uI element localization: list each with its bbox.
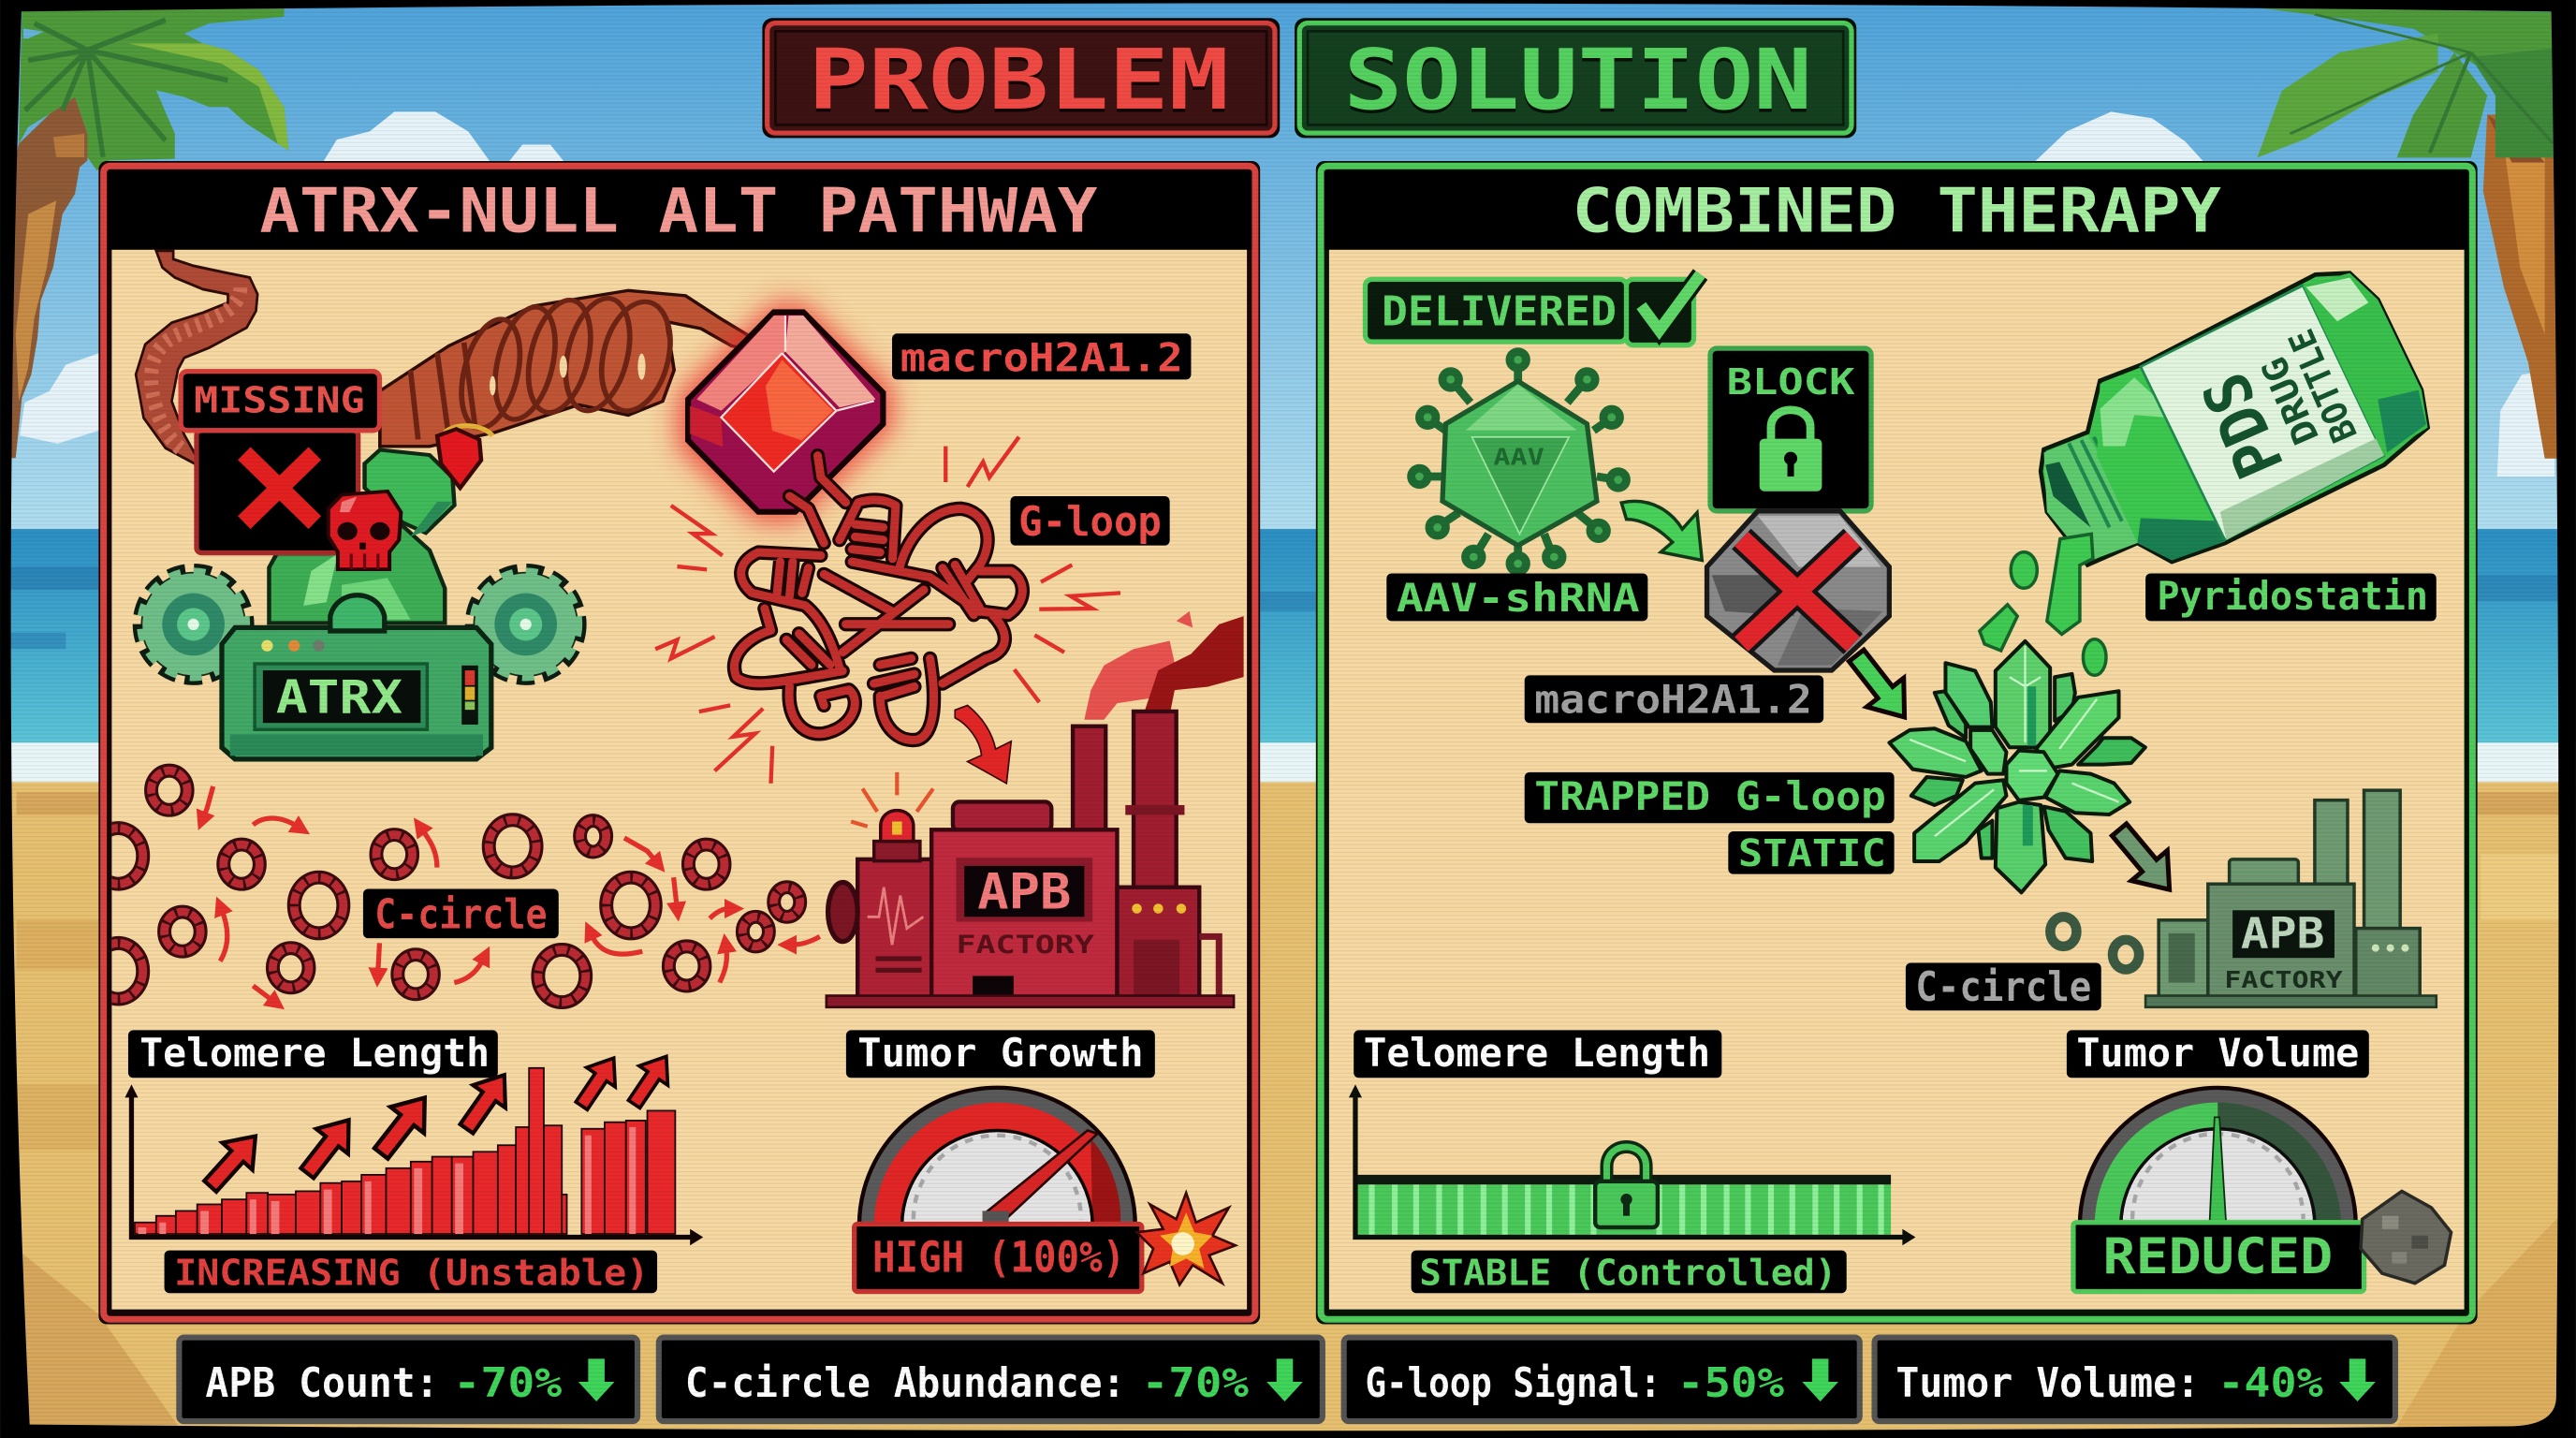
gauge readout: REDUCED bbox=[2102, 1228, 2333, 1285]
button: SOLUTION: SOLUTION bbox=[1344, 32, 1812, 129]
chimneys bbox=[1073, 712, 1177, 892]
gauge readout: HIGH (100%) bbox=[872, 1232, 1125, 1282]
panel title: COMBINED THERAPY bbox=[1573, 176, 2221, 246]
icon: AAV virus: AAV bbox=[1493, 444, 1544, 471]
label: Tumor Volume: Tumor Volume bbox=[2076, 1030, 2359, 1076]
icon: gears bbox=[140, 572, 578, 677]
arrow: gem to crystal bbox=[1838, 641, 1923, 731]
label: AAV-shRNA: AAV-shRNA bbox=[1397, 575, 1640, 621]
stat: APB count: -70% bbox=[453, 1359, 563, 1407]
icon: explosion bbox=[1137, 1193, 1236, 1284]
bottle label text: PDS bbox=[2188, 362, 2299, 488]
ATRX machine bbox=[140, 429, 578, 759]
badge: delivered: DELIVERED bbox=[1382, 287, 1617, 335]
icon: blocked grey gem bbox=[1707, 511, 1889, 670]
button: PROBLEM: PROBLEM bbox=[809, 32, 1229, 129]
block icon panel: BLOCK bbox=[1727, 361, 1855, 404]
sparks around G-loop bbox=[655, 437, 1120, 784]
label: INCREASING (Unstable): INCREASING (Unstable) bbox=[174, 1252, 649, 1294]
bottle label text bbox=[2188, 323, 2365, 488]
bars bbox=[135, 1068, 675, 1234]
missing marker bbox=[181, 372, 379, 553]
left annex bbox=[857, 859, 933, 1001]
label: MISSING: MISSING bbox=[194, 380, 365, 422]
label: Telomere Length: Telomere Length bbox=[139, 1030, 490, 1076]
axes bbox=[131, 1091, 695, 1238]
label: macroH2A1.2: macroH2A1.2 bbox=[900, 335, 1183, 381]
icon: APB factory: APB bbox=[977, 864, 1071, 921]
icon: PDS drug bottle bbox=[2041, 273, 2428, 565]
icon: APB factory bbox=[827, 712, 1234, 1007]
stat: tumor volume: -40% bbox=[2217, 1359, 2323, 1407]
gauge readout bbox=[2073, 1223, 2364, 1291]
arrow: AAV to gem bbox=[1621, 501, 1702, 560]
stat: C-circle abundance bbox=[659, 1338, 1323, 1421]
panel: combined therapy bbox=[1316, 161, 2478, 1325]
small circling arrows bbox=[204, 786, 820, 1001]
panel title bbox=[109, 171, 1251, 250]
chart: telomere length stable bbox=[1349, 1084, 1915, 1245]
icon: muted APB factory bbox=[2145, 790, 2437, 1007]
DNA coil strand bbox=[380, 290, 754, 447]
label: G-loop: G-loop bbox=[1018, 498, 1162, 546]
pouring liquid and droplets bbox=[1980, 534, 2106, 675]
stat: tumor volume bbox=[1875, 1338, 2395, 1421]
C-circle rings bbox=[94, 770, 800, 1003]
arrow: tangle to factory bbox=[955, 705, 1011, 784]
badge: delivered bbox=[1365, 274, 1701, 345]
icon: shrunken tumor rock bbox=[2361, 1191, 2452, 1284]
stat: G-loop signal: G-loop Signal: bbox=[1365, 1359, 1661, 1407]
label: macroH2A1.2 muted: macroH2A1.2 bbox=[1534, 677, 1812, 723]
label: Telomere Length: Telomere Length bbox=[1364, 1030, 1710, 1076]
panel title: ATRX-NULL ALT PATHWAY bbox=[259, 176, 1097, 246]
button: PROBLEM bbox=[762, 18, 1280, 138]
machine body bbox=[222, 595, 491, 759]
bar chart: telomere length increasing bbox=[124, 1047, 703, 1245]
small muted C-circles bbox=[2050, 917, 2139, 969]
rising arrows bbox=[196, 1047, 681, 1200]
tangled G-loop bbox=[734, 456, 1022, 741]
icon: green organ with balloon bbox=[269, 429, 481, 623]
main building bbox=[931, 829, 1117, 1003]
right palm tree bbox=[2253, 7, 2557, 459]
icon: AAV virus bbox=[1412, 352, 1627, 572]
icon: padlock on chart bbox=[1595, 1147, 1658, 1227]
label: TRAPPED G-loop: TRAPPED G-loop bbox=[1534, 773, 1886, 819]
gauge readout bbox=[855, 1224, 1142, 1291]
stat: C-circle abundance: -70% bbox=[1142, 1359, 1250, 1407]
panel: ATRX-null ALT pathway bbox=[94, 161, 1260, 1325]
gauge: tumor volume reduced bbox=[2073, 1088, 2364, 1291]
label: STABLE (Controlled): STABLE (Controlled) bbox=[1419, 1252, 1837, 1294]
bottle label text: BOTTLE bbox=[2280, 323, 2365, 448]
label: C-circle muted: C-circle bbox=[1915, 963, 2091, 1011]
icon: red macroH2A1.2 gem bbox=[677, 302, 894, 522]
icon: muted APB factory: APB bbox=[2241, 909, 2324, 959]
stat: tumor volume: Tumor Volume: bbox=[1895, 1359, 2200, 1407]
icon: padlock bbox=[1760, 410, 1822, 492]
arrow: crystal to factory bbox=[2101, 814, 2188, 904]
label: MISSING bbox=[181, 372, 379, 431]
smoke bbox=[1084, 611, 1244, 720]
icon: skull bbox=[329, 492, 401, 569]
DNA tail strand bbox=[136, 251, 257, 468]
base bbox=[827, 996, 1234, 1007]
siren bbox=[874, 842, 920, 861]
stat: APB count: APB Count: bbox=[205, 1359, 439, 1407]
icon: muted APB factory: FACTORY bbox=[2224, 966, 2343, 993]
label: Tumor Growth: Tumor Growth bbox=[857, 1030, 1144, 1076]
icon: green crystal cluster bbox=[1889, 641, 2145, 892]
top block bbox=[953, 801, 1051, 831]
gauge: tumor growth high bbox=[855, 1088, 1142, 1291]
label: Pyridostatin: Pyridostatin bbox=[2157, 573, 2428, 619]
stat: G-loop signal: -50% bbox=[1677, 1359, 1785, 1407]
icon: APB factory: FACTORY bbox=[956, 932, 1094, 960]
bottle label text: DRUG bbox=[2253, 351, 2327, 450]
label: C-circle: C-circle bbox=[374, 891, 547, 939]
stat: C-circle abundance: C-circle Abundance: bbox=[685, 1359, 1125, 1407]
block icon panel bbox=[1710, 348, 1871, 511]
right annex bbox=[1117, 888, 1199, 1003]
stat: APB count bbox=[179, 1338, 637, 1421]
machine body: ATRX bbox=[276, 670, 402, 725]
button: SOLUTION bbox=[1295, 18, 1856, 138]
stat: G-loop signal bbox=[1344, 1338, 1860, 1421]
clouds bbox=[20, 111, 2554, 477]
left palm tree bbox=[7, 8, 289, 458]
label: STATIC: STATIC bbox=[1738, 831, 1886, 875]
panel title bbox=[1325, 171, 2467, 250]
